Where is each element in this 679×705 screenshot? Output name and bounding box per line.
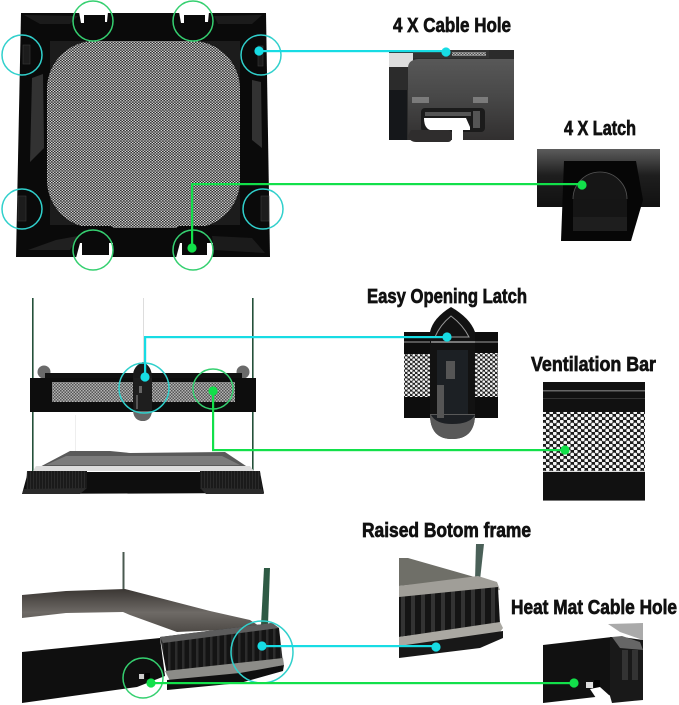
front latch bbox=[133, 362, 152, 421]
connector: cable hole bbox=[254, 46, 451, 57]
panel: top view of lid bbox=[16, 12, 270, 258]
detail photo: easy opening latch bbox=[404, 307, 498, 439]
connector: easy opening latch bbox=[140, 332, 452, 382]
base frame bbox=[22, 472, 264, 494]
lid frame bbox=[16, 13, 270, 257]
glass edges bbox=[32, 298, 254, 473]
connector: heat mat cable hole bbox=[146, 678, 579, 688]
panel: corner view of bottom frame bbox=[22, 552, 284, 703]
dark mesh corners bbox=[50, 41, 240, 225]
detail photo: ventilation bar bbox=[543, 382, 645, 501]
detail photo: latch bbox=[537, 149, 660, 241]
tray floor bbox=[34, 451, 252, 470]
heading: 4 X Cable Hole: 4 X Cable Hole bbox=[393, 15, 511, 37]
callout circles: front view bbox=[119, 363, 233, 413]
silver back frame bbox=[22, 589, 262, 632]
detail photo: cable hole bbox=[389, 50, 514, 143]
heading: Easy Opening Latch: Easy Opening Latch bbox=[367, 286, 527, 308]
detail photo: heat mat cable hole bbox=[543, 623, 643, 703]
heading: Raised Botom frame: Raised Botom frame bbox=[362, 520, 531, 542]
glass posts bbox=[122, 552, 124, 592]
knobs bbox=[38, 366, 50, 378]
ribbed corner block bbox=[160, 623, 283, 675]
callout circles: corner view bbox=[123, 621, 293, 698]
engraved words bbox=[412, 97, 488, 103]
cable notch bbox=[135, 683, 160, 698]
connector: ventilation bar bbox=[208, 386, 570, 455]
corner tabs bbox=[18, 45, 269, 221]
slot bbox=[421, 108, 485, 132]
top view callout circles bbox=[2, 1, 283, 270]
panel: front view of terrarium bbox=[22, 298, 264, 494]
heading: 4 X Latch: 4 X Latch bbox=[564, 118, 636, 140]
heading: Ventilation Bar: Ventilation Bar bbox=[531, 354, 656, 376]
latch body bbox=[430, 307, 475, 439]
left hook bbox=[408, 130, 452, 142]
latch lobes bbox=[75, 30, 215, 236]
detail photo: raised bottom frame bbox=[399, 544, 503, 658]
frame highlights bbox=[24, 15, 265, 253]
black front band bbox=[22, 638, 165, 703]
top latch notches bbox=[76, 12, 213, 258]
ventilation mesh bbox=[47, 41, 240, 228]
connector: raised bottom frame bbox=[257, 641, 441, 652]
ventilation bar bbox=[45, 373, 242, 379]
connector: latch bbox=[187, 180, 587, 253]
